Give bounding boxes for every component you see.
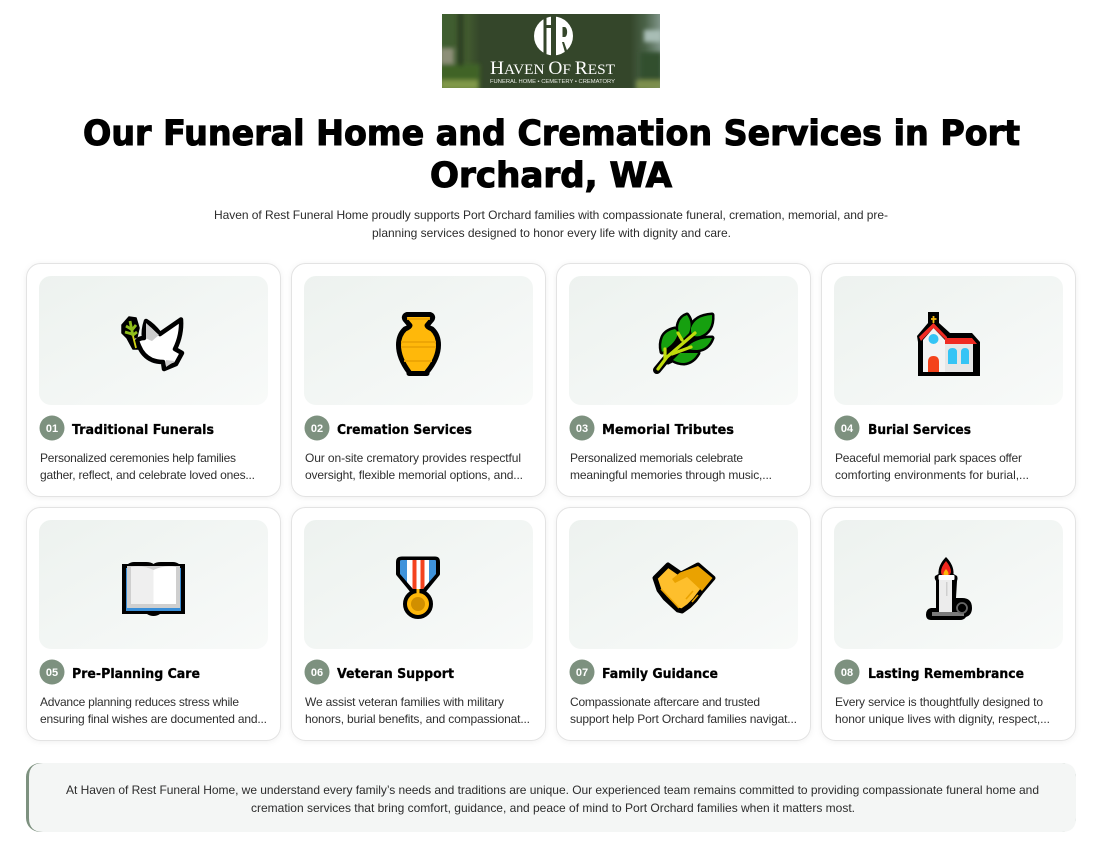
card description: oversight, flexible memorial options, and...: [305, 468, 523, 482]
panel: Memorial Tributes: [556, 264, 810, 496]
intro text: Haven of Rest Funeral Home proudly supports Port Orchard families with compassionate funeral, cremation, memorial, and pre-: [214, 208, 888, 222]
card description: Personalized memorials celebrate: [570, 451, 743, 465]
intro text: planning services designed to honor every life with dignity and care.: [372, 226, 731, 240]
card description: [305, 695, 530, 726]
title: Orchard, WA: [430, 156, 672, 196]
card description: comforting environments for burial,...: [835, 468, 1029, 482]
card description: meaningful memories through music,...: [570, 468, 772, 482]
card description: honors, burial benefits, and compassionat...: [305, 712, 530, 726]
icon: chapel: [917, 312, 980, 376]
card description: Peaceful memorial park spaces offer: [835, 451, 1022, 465]
card title: Traditional Funerals: [72, 422, 214, 438]
card description: honor unique lives with dignity, respect,...: [835, 712, 1050, 726]
panel: Pre-Planning Care: [26, 508, 280, 740]
logo: Haven of Rest: HAVEN OF REST: [490, 58, 615, 79]
badge 08: 08: [841, 667, 853, 679]
callout: closing statement: cremation services that bring comfort, guidance, and peace of mind to Port Orchard families when it matters most.: [251, 801, 855, 815]
callout: closing statement: At Haven of Rest Funeral Home, we understand every family’s needs and traditions are unique. Our experienced team remains committed to providing compassionate funeral home and: [66, 783, 1039, 797]
card description: Our on-site crematory provides respectful: [305, 451, 521, 465]
card description: Every service is thoughtfully designed to: [835, 695, 1043, 709]
icon: urn: [398, 314, 438, 374]
badge 04: 04: [841, 423, 854, 435]
badge 06: 06: [311, 667, 323, 679]
card description: We assist veteran families with military: [305, 695, 504, 709]
card description: ensuring final wishes are documented and...: [40, 712, 267, 726]
badge 04: [834, 416, 860, 440]
title: Our Funeral Home and Cremation Services in Port: [83, 114, 1020, 154]
icon: handshake: [655, 565, 713, 611]
card description: [305, 451, 523, 482]
card description: [570, 695, 797, 726]
panel: Veteran Support: [292, 508, 546, 740]
logo: Haven of Rest: FUNERAL HOME • CEMETERY • CREMATORY: [490, 79, 616, 85]
badge 05: [40, 660, 64, 684]
badge 02: [304, 416, 330, 440]
panel: Burial Services: [822, 264, 1076, 496]
card description: support help Port Orchard families navigat...: [570, 712, 797, 726]
panel: Traditional Funerals: [26, 264, 280, 496]
card title: Cremation Services: [337, 422, 472, 438]
badge 02: 02: [311, 423, 323, 435]
card title: Pre-Planning Care: [72, 666, 200, 682]
icon: military medal: [398, 558, 438, 617]
callout: closing statement: [26, 763, 1076, 832]
badge 01: 01: [46, 423, 58, 435]
icon: dove with olive branch: [122, 317, 182, 369]
card title: Veteran Support: [337, 666, 455, 682]
card description: [835, 695, 1050, 726]
logo: Haven of Rest: [440, 12, 662, 90]
card description: Compassionate aftercare and trusted: [570, 695, 760, 709]
card description: Advance planning reduces stress while: [40, 695, 239, 709]
badge 06: [304, 660, 330, 684]
card description: Personalized ceremonies help families: [40, 451, 236, 465]
card title: Burial Services: [868, 422, 971, 438]
panel: Lasting Remembrance: [822, 508, 1076, 740]
badge 03: 03: [576, 423, 588, 435]
icon: candle: [926, 557, 972, 620]
badge 08: [834, 660, 860, 684]
card description: gather, reflect, and celebrate loved ones...: [40, 468, 255, 482]
intro text: [214, 208, 888, 240]
badge 07: [570, 660, 594, 684]
badge 05: 05: [46, 667, 58, 679]
badge 01: [40, 416, 64, 440]
panel: Cremation Services: [292, 264, 546, 496]
card description: [835, 451, 1029, 482]
card title: Memorial Tributes: [602, 422, 734, 438]
card description: [40, 695, 267, 726]
card description: [40, 451, 255, 482]
card description: [570, 451, 772, 482]
title: [83, 114, 1020, 196]
card title: Lasting Remembrance: [868, 666, 1024, 682]
panel: Family Guidance: [556, 508, 810, 740]
icon: open book: [122, 562, 185, 616]
badge 03: [570, 416, 594, 440]
icon: laurel branch: [657, 315, 712, 370]
badge 07: 07: [576, 667, 588, 679]
card title: Family Guidance: [602, 666, 718, 682]
